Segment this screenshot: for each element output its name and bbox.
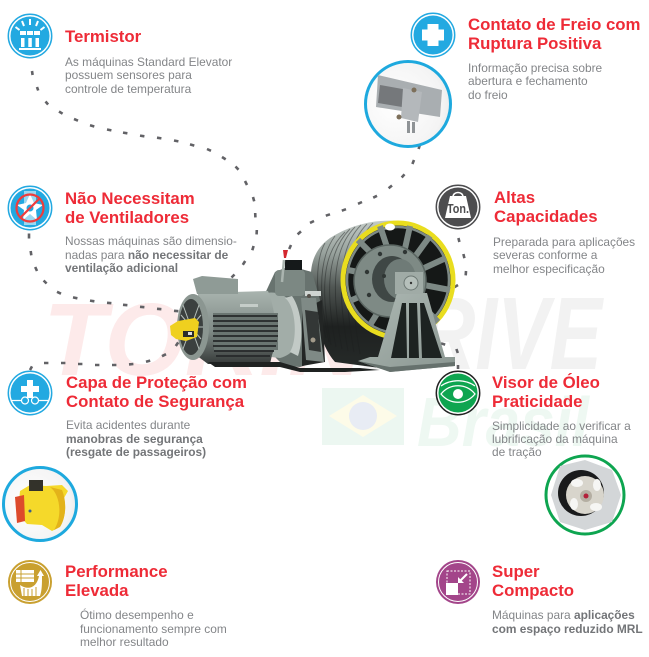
- icon: ton weight: [436, 185, 480, 229]
- item: Performance Elevada: [8, 560, 227, 649]
- heading: Capa de Proteção: Contato de Segurança: [66, 392, 245, 411]
- icon: ton weight: Ton.: [447, 202, 469, 216]
- heading: Visor de Óleo: Visor de Óleo: [492, 373, 600, 392]
- heading: Altas Capacidades: Altas: [494, 188, 535, 207]
- watermark: Brasil flag: [322, 388, 404, 445]
- text: Ventiladores description: Nossas máquinas são dimensio-: [65, 234, 237, 248]
- heading: Contato de Freio: Contato de Freio com: [468, 15, 640, 34]
- heading: Super Compacto: Super: [492, 562, 540, 581]
- heading: Performance Elevada: Elevada: [65, 581, 129, 600]
- item: Altas Capacidades: [436, 185, 635, 276]
- text: Visor description: lubrificação da máquina: [492, 432, 618, 446]
- text: Visor description: Simplicidade ao verificar a: [492, 419, 631, 433]
- watermark: Torin Drive: [43, 276, 605, 397]
- icon: eye: [436, 371, 480, 415]
- watermark: Torin Drive: TORIN: [43, 282, 366, 397]
- text: Visor description: de tração: [492, 445, 542, 459]
- text: Contato description: do freio: [468, 88, 508, 102]
- photo: oil sight glass: [546, 456, 624, 534]
- text: Super Compacto description: com espaço reduzido MRL: [492, 622, 643, 636]
- watermark: Brasil word: Brasil: [417, 383, 590, 461]
- photo: yellow protection cap: [4, 468, 76, 540]
- heading: Super Compacto: Compacto: [492, 581, 574, 600]
- heading: Contato de Freio: Ruptura Positiva: [468, 34, 602, 53]
- text: Capa description: manobras de segurança: [66, 432, 203, 446]
- item: Não Necessitam de Ventiladores: [8, 186, 237, 275]
- heading: Capa de Proteção: Capa de Proteção com: [66, 373, 247, 392]
- machine: fan cover: [177, 294, 209, 360]
- icon: compact squares: [436, 560, 480, 604]
- machine: motor body: [196, 291, 278, 364]
- text: Performance description: Ótimo desempenho e: [80, 608, 194, 622]
- text: Ventiladores description: ventilação adicional: [65, 261, 178, 275]
- text: Contato description: Informação precisa sobre: [468, 61, 602, 75]
- text: Performance description: funcionamento sempre com: [80, 622, 227, 636]
- dotted connector lines: [29, 71, 466, 370]
- heading: Visor de Óleo: Praticidade: [492, 392, 582, 411]
- icon: no fan: [8, 186, 52, 230]
- machine: grooved drum: [311, 221, 420, 368]
- text: Performance description: melhor resultado: [80, 635, 169, 649]
- machine: yellow encoder cap: [170, 318, 199, 341]
- text: Altas description: Preparada para aplicações: [493, 235, 635, 249]
- text: Contato description: abertura e fechamento: [468, 74, 588, 88]
- text: Termistor description: possuem sensores para: [65, 68, 192, 82]
- icon: plus: [411, 13, 455, 57]
- heading: Termistor: Termistor: [65, 27, 142, 46]
- text: Altas description: severas conforme a: [493, 248, 598, 262]
- item: Visor de Óleo: [436, 371, 631, 534]
- heading: Não Necessitam de Ventiladores: de Ventiladores: [65, 208, 189, 227]
- item: Termistor: [8, 14, 232, 96]
- machine: brake and coupling: [262, 250, 325, 367]
- machine: pedestal: [358, 272, 455, 372]
- text: Altas description: melhor especificação: [493, 262, 605, 276]
- photo: brake contact: [366, 62, 450, 146]
- heading: Não Necessitam de Ventiladores: Não Necessitam: [65, 189, 195, 208]
- item: Super Compacto: [436, 560, 643, 636]
- machine: yellow sheave ring: [343, 223, 453, 337]
- text: Capa description: (resgate de passageiros): [66, 445, 206, 459]
- machine: ground shadow: [208, 362, 380, 372]
- icon: plus with contacts: [8, 371, 52, 415]
- item: Capa de Proteção: [4, 371, 247, 540]
- icon: thermistor: [8, 14, 52, 58]
- heading: Performance Elevada: Performance: [65, 562, 168, 581]
- heading: Altas Capacidades: Capacidades: [494, 207, 598, 226]
- item: Contato de Freio: [366, 13, 640, 146]
- text: Capa description: Evita acidentes durante: [66, 418, 190, 432]
- text: Ventiladores description: nadas para: [65, 248, 128, 262]
- icon: performance chart: [8, 560, 52, 604]
- text: Super Compacto description: Máquinas para aplicações: [492, 608, 635, 622]
- text: Ventiladores description: não necessitar de: [128, 248, 229, 262]
- text: Termistor description: As máquinas Standard Elevator: [65, 55, 232, 69]
- traction machine: [170, 221, 455, 372]
- machine: terminal box: [193, 276, 238, 294]
- machine: spokes and hub: [347, 224, 450, 333]
- text: Termistor description: controle de temperatura: [65, 82, 192, 96]
